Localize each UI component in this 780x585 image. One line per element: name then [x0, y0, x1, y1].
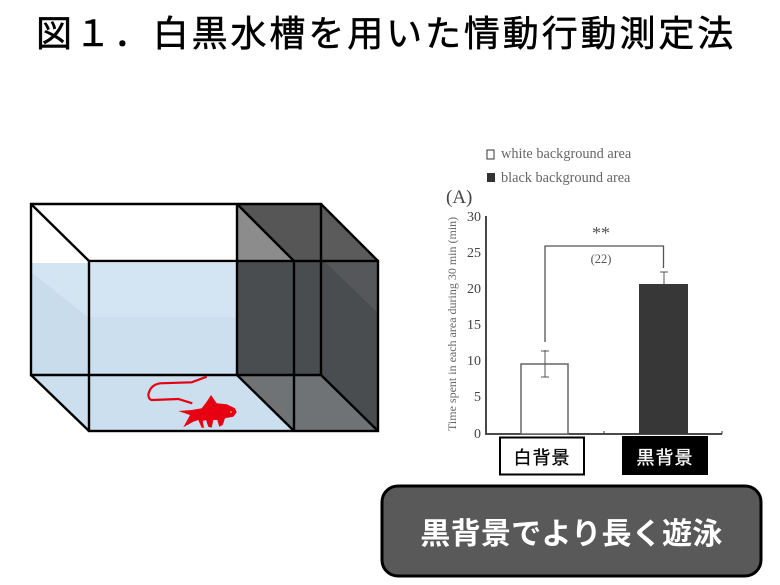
legend: white background area [501, 146, 632, 162]
white bar [521, 364, 568, 434]
y axis labels: 20 [467, 282, 481, 297]
title: 図１．白黒水槽を用いた情動行動測定法 [36, 5, 736, 57]
y axis labels: 0 [474, 427, 481, 442]
y axis title: Time spent in each area during 30 min (min) [445, 217, 459, 431]
label: white background: 白背景 [514, 444, 570, 470]
significance stars: ** [592, 223, 610, 243]
legend [487, 146, 632, 186]
icon: goldfish [178, 395, 237, 428]
callout [382, 486, 761, 576]
legend: black background area [501, 170, 631, 186]
dark section of tank [237, 204, 378, 431]
water [31, 263, 294, 431]
axes [486, 216, 722, 434]
illustration: water tank [31, 204, 378, 431]
y axis labels [467, 210, 481, 442]
black bar [639, 284, 688, 434]
sample size: (22) [591, 252, 611, 266]
y axis labels: 5 [474, 390, 481, 405]
panel label: (A) [446, 187, 472, 208]
swim path [148, 377, 207, 403]
callout: 黒背景でより長く遊泳 [420, 509, 723, 553]
label: white background [500, 438, 584, 474]
error bars [541, 272, 668, 377]
bar chart [445, 187, 722, 442]
label: black background: 黒背景 [636, 444, 694, 470]
y axis labels: 10 [467, 354, 481, 369]
tank outline [31, 204, 378, 431]
y axis labels: 25 [467, 246, 481, 261]
significance bracket [545, 246, 664, 342]
y axis labels: 30 [467, 210, 481, 225]
y axis labels: 15 [467, 318, 481, 333]
label: black background [622, 436, 708, 475]
